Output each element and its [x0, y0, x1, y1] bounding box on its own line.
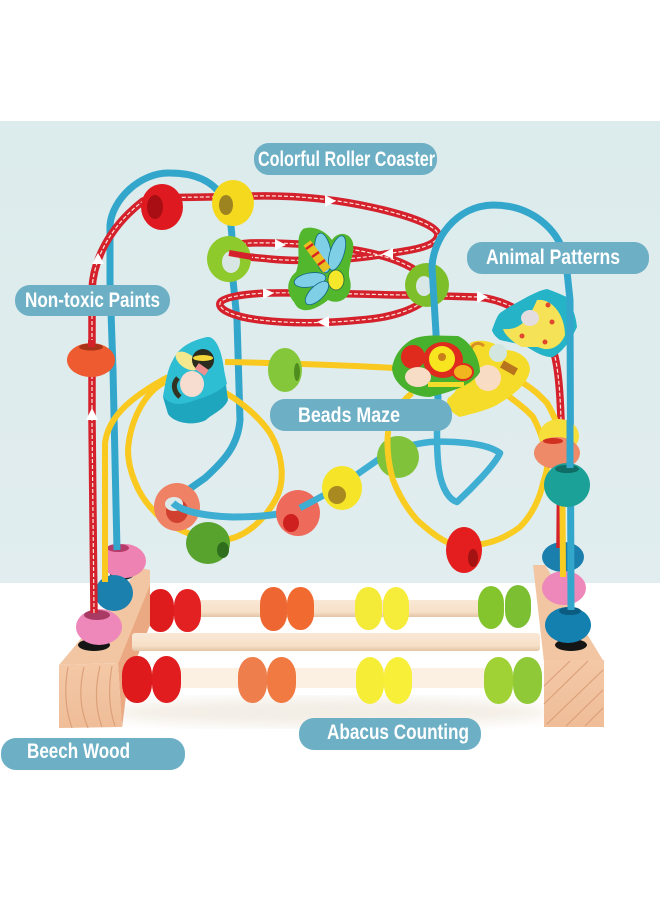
bead: teal right — [544, 463, 590, 507]
bead: orange on red wire — [67, 340, 115, 377]
bead: yellow middle — [322, 466, 362, 510]
label: Animal Patterns — [467, 242, 649, 274]
front rod — [178, 668, 490, 688]
bead: green lower — [186, 522, 230, 564]
arrows on red wire — [86, 195, 488, 420]
animal tag: yellow monkey — [447, 341, 530, 417]
wooden base — [59, 565, 604, 728]
blue hoop wire — [173, 503, 295, 517]
bead: green on yellow wire — [268, 348, 302, 392]
blue maze wire — [300, 395, 500, 508]
red wire — [92, 196, 561, 613]
front abacus beads — [122, 656, 542, 704]
bead: red lower right — [446, 527, 482, 573]
label: Abacus Counting — [299, 718, 481, 750]
yellow wires right — [387, 383, 563, 577]
animal tag: butterfly — [492, 289, 577, 357]
animal tag: bee — [163, 337, 228, 423]
base beads right — [542, 542, 591, 651]
blue wire back — [110, 173, 240, 550]
bead: coral left loop — [154, 483, 200, 531]
animal tag: snail — [392, 336, 480, 397]
label: Non-toxic Paints: Non-toxic Paints — [25, 289, 160, 312]
label: Beads Maze: Beads Maze — [298, 404, 400, 427]
bead: yellow back right — [539, 419, 579, 453]
label: Colorful Roller Coaster — [254, 143, 437, 175]
label: Colorful Roller Coaster: Colorful Roller Coaster — [258, 148, 435, 171]
left rail — [59, 568, 150, 728]
label: Animal Patterns: Animal Patterns — [486, 246, 620, 269]
bead: coral middle — [276, 490, 320, 536]
bead: coral back right — [534, 437, 580, 469]
blue wire over coral bead — [566, 420, 574, 468]
blue wire right loop — [432, 205, 571, 610]
animal tag: dragonfly — [288, 228, 353, 310]
bead: red top — [141, 184, 183, 230]
background wall — [0, 121, 660, 583]
label: Non-toxic Paints — [15, 285, 170, 316]
bead: green left — [207, 236, 252, 282]
bead: green middle — [377, 436, 419, 478]
label: Beads Maze — [270, 399, 452, 431]
right rail — [533, 565, 604, 727]
back abacus beads — [147, 585, 531, 632]
base beads left — [76, 544, 146, 651]
back rod — [190, 600, 490, 617]
yellow wires left — [105, 362, 395, 582]
label: Beech Wood — [1, 738, 185, 770]
middle rod — [132, 633, 540, 651]
label: Beech Wood: Beech Wood — [27, 740, 130, 763]
bead: green right — [405, 263, 449, 307]
table shadow — [110, 698, 550, 726]
label: Abacus Counting: Abacus Counting — [327, 721, 469, 744]
bead: yellow top — [212, 180, 254, 226]
